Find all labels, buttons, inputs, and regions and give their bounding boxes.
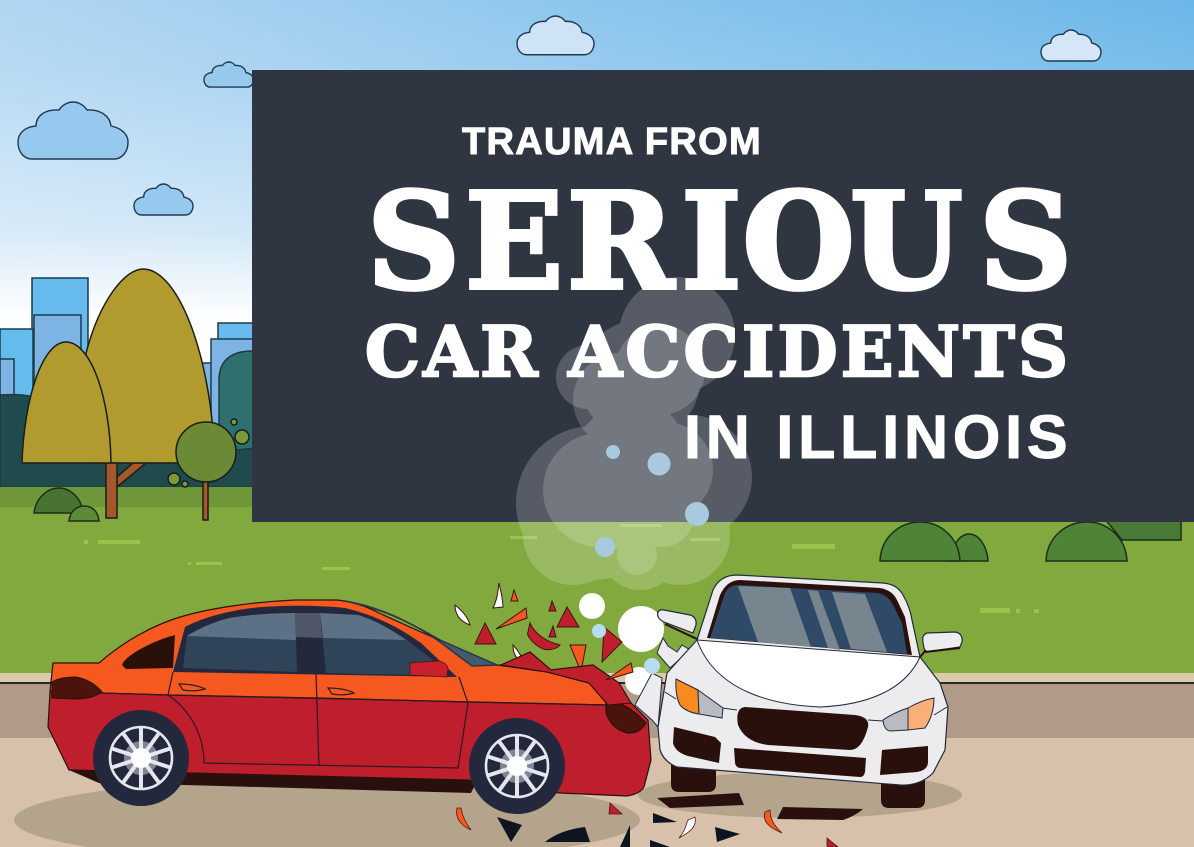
- title text: SERIOUS: [367, 163, 1072, 319]
- smoke cloud: [516, 277, 752, 590]
- side windows: [183, 613, 433, 675]
- car shadows: [14, 772, 962, 847]
- city buildings: [0, 278, 258, 489]
- title text: [365, 121, 1072, 471]
- red lower body: [48, 652, 651, 796]
- taillight: [52, 677, 102, 699]
- title text: IN ILLINOIS: [684, 403, 1072, 471]
- title text: CAR ACCIDENTS: [365, 312, 1071, 393]
- ground debris: [457, 793, 863, 847]
- grass dashes: [84, 524, 1039, 613]
- red car: [48, 600, 651, 796]
- round green tree: [168, 419, 249, 520]
- rear wheel: [93, 710, 189, 806]
- sidewalk and road: [0, 673, 1194, 847]
- left tall tree: [22, 269, 213, 518]
- side mirror: [410, 661, 448, 677]
- front wheel: [469, 718, 565, 814]
- white car shattered fender: [635, 638, 690, 727]
- headlight: [606, 698, 646, 733]
- bushes left: [34, 488, 99, 521]
- bubbles: [579, 445, 709, 695]
- sky background: [0, 0, 1194, 510]
- side mirrors: [658, 610, 962, 652]
- rear quarter window: [122, 635, 175, 669]
- bushes right: [880, 518, 1181, 561]
- windshield frame: [707, 580, 912, 655]
- window frame: [173, 606, 457, 677]
- title panel: [252, 70, 1194, 522]
- body crease lines: [665, 692, 947, 721]
- windshield glass: [710, 585, 907, 654]
- headlights: [676, 679, 934, 731]
- grilles and vents: [673, 707, 928, 777]
- white car body: [658, 575, 948, 785]
- mirror stalks: [665, 624, 960, 657]
- white car tires: [671, 760, 925, 808]
- teal background trees: [0, 351, 256, 487]
- grass bands: [0, 487, 1194, 507]
- door outlines: [101, 672, 608, 768]
- clouds: [18, 16, 1101, 215]
- underbody: [69, 770, 480, 793]
- upper debris: [455, 583, 622, 672]
- white car: [635, 575, 962, 808]
- windshield strip: [345, 601, 497, 666]
- title text: TRAUMA FROM: [462, 121, 762, 163]
- small blue bubbles: [592, 624, 660, 674]
- orange upper body: [50, 600, 608, 705]
- windshield reflections: [738, 586, 887, 652]
- hood: [697, 640, 920, 707]
- crumpled hood: [501, 652, 631, 705]
